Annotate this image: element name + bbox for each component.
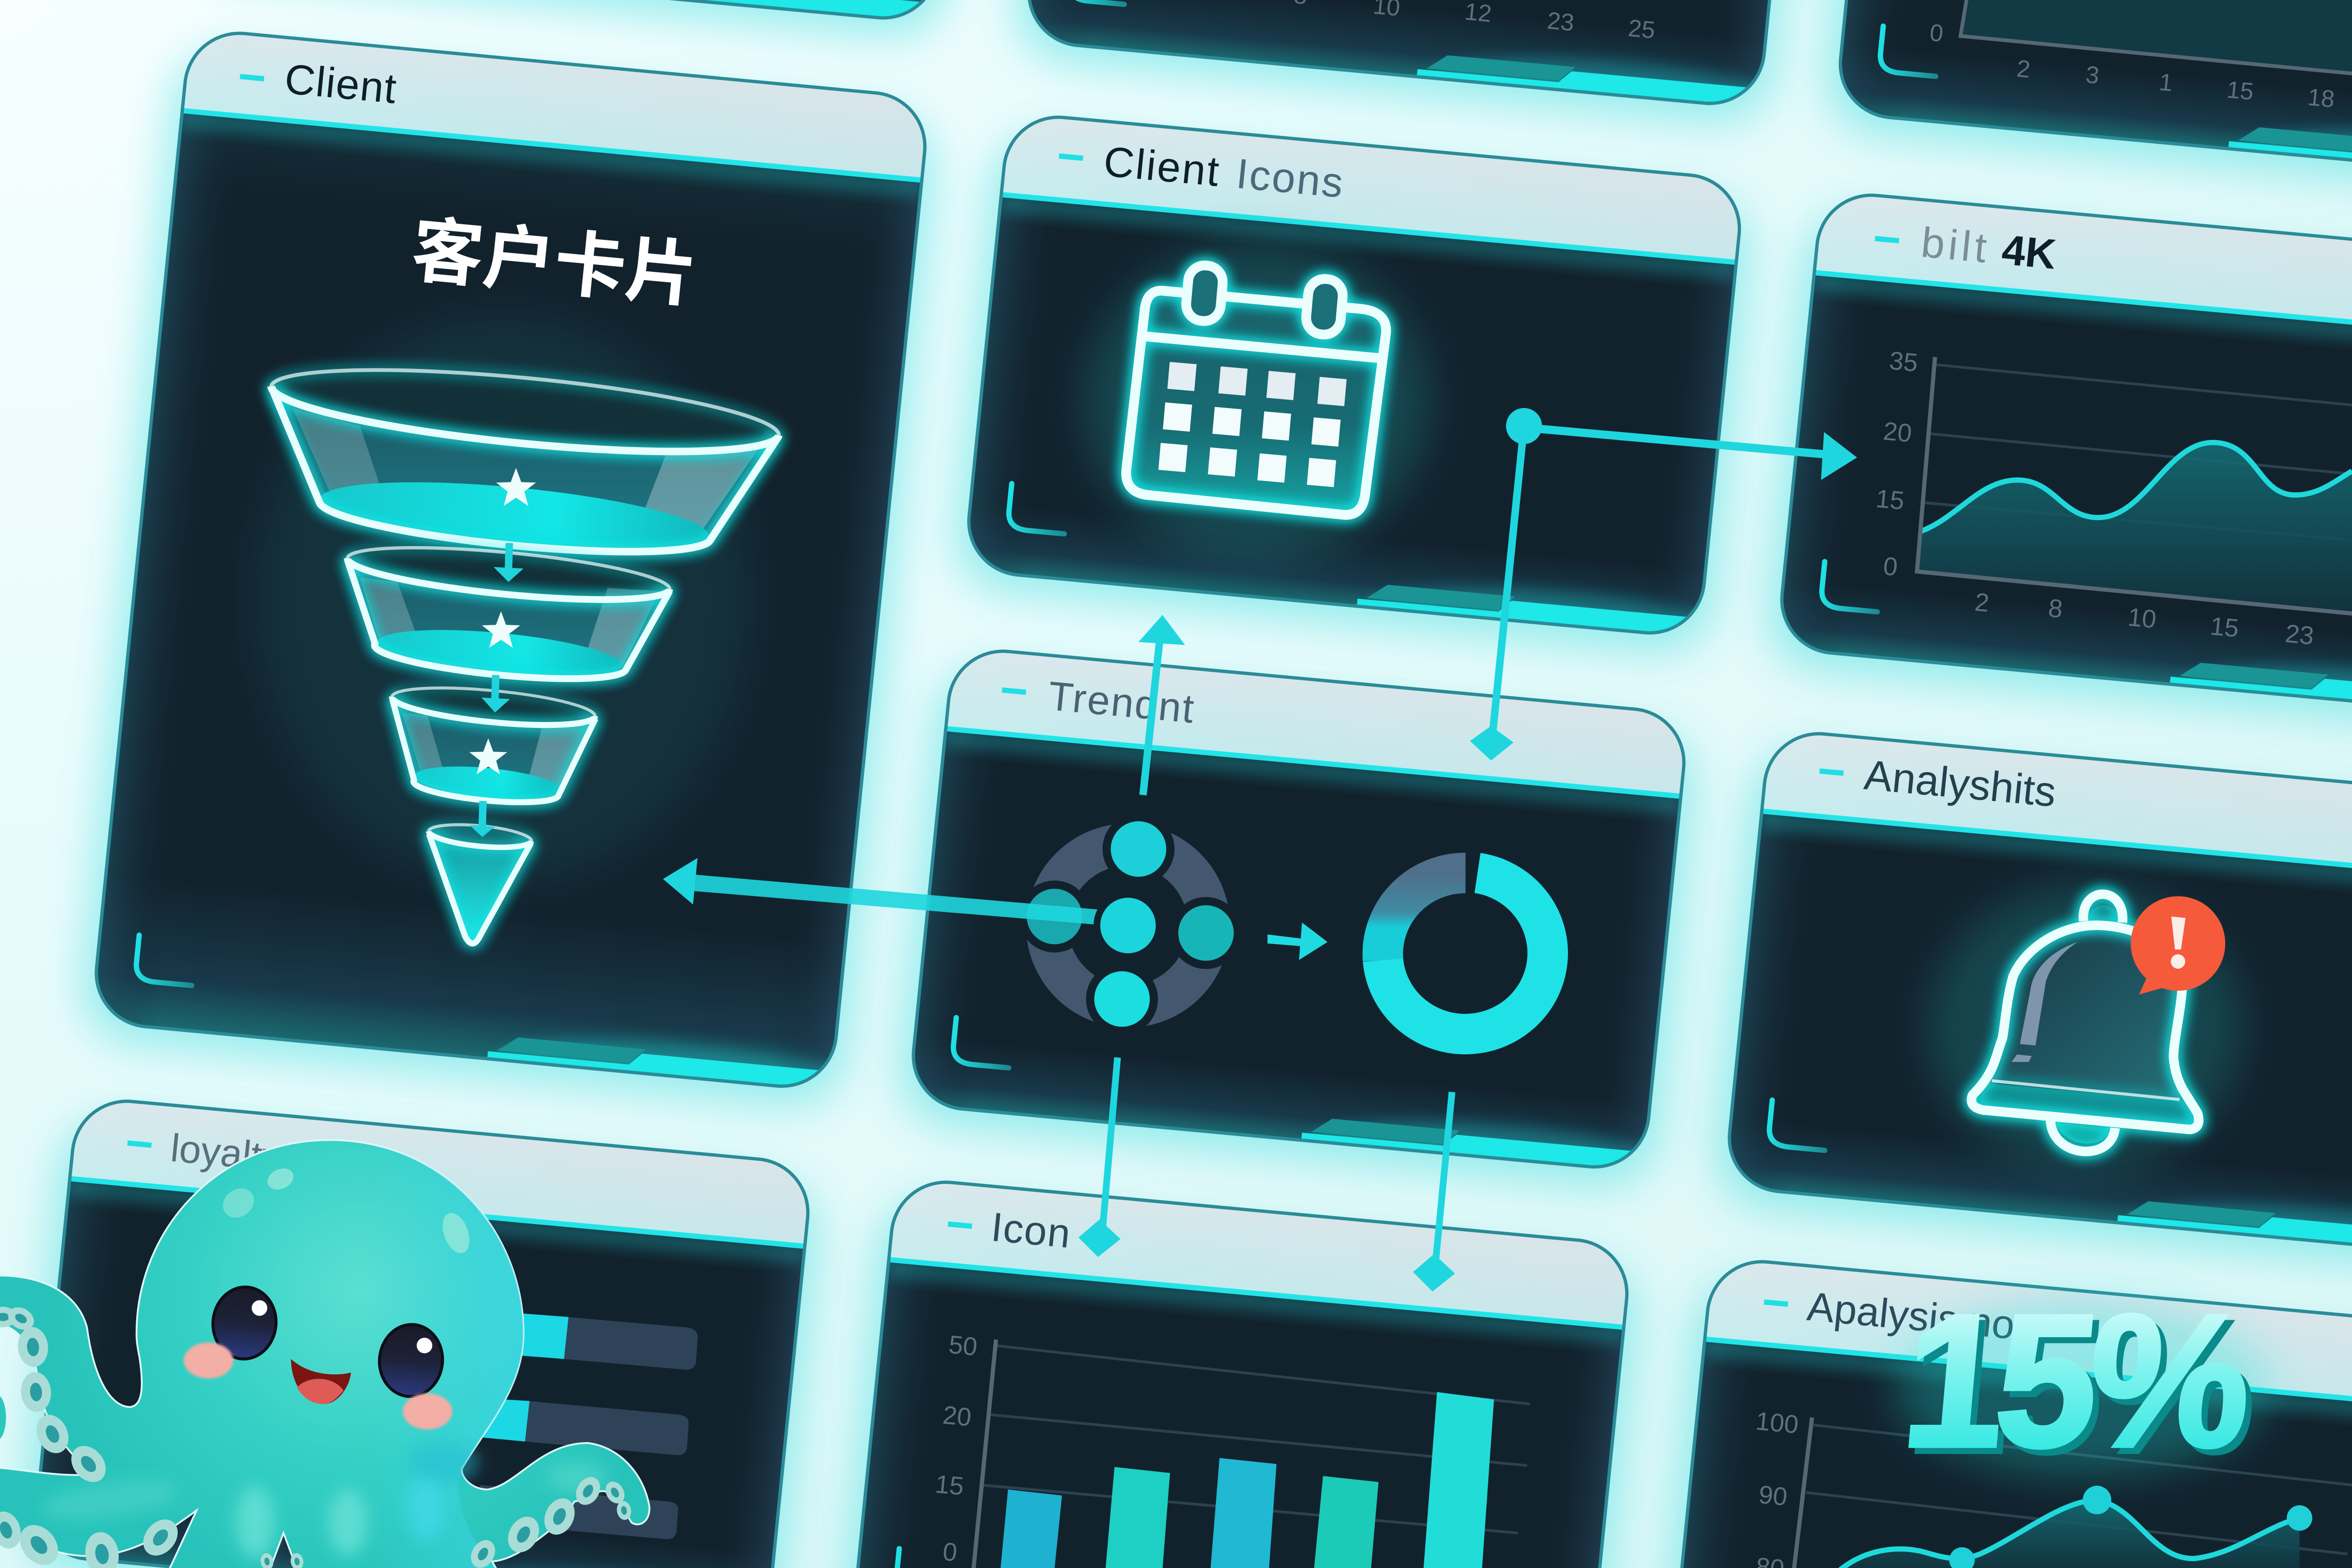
panel: top middle partial card bbox=[1008, 0, 1864, 147]
panel: top left partial card bbox=[182, 0, 1038, 61]
connector: dot to donut bbox=[1470, 426, 1524, 760]
connector: wheel down bbox=[1078, 1057, 1120, 1257]
far left arm tip bbox=[0, 1395, 6, 1440]
panel: Trendnt bbox=[893, 645, 1749, 1210]
right arm suckers bbox=[466, 1473, 633, 1568]
bell ambient glow bbox=[1927, 885, 2243, 1170]
mouth bbox=[291, 1359, 351, 1404]
donut chart bbox=[1383, 873, 1548, 1034]
panel: Icon bbox=[836, 1176, 1692, 1568]
heading: customer card: 客户卡片 bbox=[408, 210, 701, 316]
line chart: 90 bbox=[1757, 1480, 1788, 1511]
panel: Analyshits bbox=[1709, 728, 2352, 1293]
tier 4 cone bbox=[427, 821, 532, 945]
connector: donut down bbox=[1413, 1092, 1455, 1291]
header dash bbox=[1820, 771, 1844, 773]
connector: dot to line chart arrow bbox=[1506, 408, 1857, 480]
octopus mascot bbox=[0, 1140, 650, 1568]
header dash bbox=[1002, 690, 1026, 692]
soft shading bbox=[40, 1442, 607, 1559]
upper arm suckers bbox=[0, 1303, 113, 1489]
line chart: 8 bbox=[2047, 594, 2064, 623]
title: Client Icons bbox=[1102, 138, 1347, 206]
lower arm suckers bbox=[0, 1507, 185, 1568]
progress bars bbox=[477, 1313, 698, 1539]
header dash bbox=[1875, 238, 1899, 241]
tier 3 bbox=[391, 681, 596, 805]
header dash bbox=[1059, 156, 1083, 158]
line chart: 2 bbox=[1974, 588, 1991, 617]
header dash bbox=[128, 1143, 152, 1145]
bar chart: 0 bbox=[941, 1537, 958, 1567]
funnel bbox=[255, 315, 782, 945]
funnel ambient glow bbox=[255, 315, 750, 885]
chart fragment: 2 bbox=[2016, 55, 2032, 83]
small arrow bbox=[1267, 923, 1328, 960]
big stat: 15%: 15% bbox=[1902, 1281, 2263, 1492]
line chart: 15 bbox=[2209, 612, 2240, 643]
line chart bbox=[1874, 346, 2352, 650]
chart fragment: 18 bbox=[2306, 83, 2336, 113]
line chart: 35 bbox=[1888, 346, 1919, 377]
chart fragment: 1 bbox=[2158, 68, 2174, 97]
panel: top right partial card bbox=[1820, 0, 2352, 219]
header dash bbox=[240, 76, 264, 79]
icon: calendar bbox=[1085, 245, 1429, 560]
title: Analyshits bbox=[1862, 751, 2058, 816]
line chart: 100 bbox=[1755, 1406, 1800, 1439]
bell highlight bbox=[2011, 942, 2077, 1062]
header dash bbox=[948, 1224, 972, 1226]
title: loyalty bbox=[169, 1126, 284, 1180]
axis labels bbox=[1292, 0, 1657, 44]
connector: wheel up arrow bbox=[1138, 615, 1185, 795]
chart fragment: 15 bbox=[2225, 76, 2255, 105]
alert badge bbox=[2131, 896, 2225, 995]
axis labels: 25 bbox=[1627, 15, 1657, 44]
line chart: 10 bbox=[2126, 603, 2158, 634]
bar chart: 15 bbox=[934, 1470, 965, 1501]
axis labels: 23 bbox=[1546, 7, 1576, 36]
line chart: 0 bbox=[1882, 552, 1899, 581]
calendar date grid bbox=[1159, 362, 1347, 487]
title: bilt 4K bbox=[1919, 219, 2058, 278]
right side cyan tint bbox=[330, 1140, 523, 1568]
bar chart: 20 bbox=[941, 1401, 972, 1432]
calendar ambient glow bbox=[1085, 245, 1429, 560]
header dash bbox=[1764, 1302, 1788, 1304]
panel: Analysis bbox=[1652, 1256, 2352, 1568]
big stat: 15%: 15% bbox=[1895, 1275, 2257, 1486]
line chart: 20 bbox=[1882, 416, 1913, 448]
chart fragment: 0 bbox=[1928, 19, 1944, 47]
cheeks bbox=[184, 1342, 452, 1429]
leg notch suckers bbox=[259, 1552, 305, 1568]
tier 1 bbox=[268, 354, 782, 566]
line chart bbox=[1755, 1406, 2352, 1568]
chart fragment bbox=[1928, 0, 2352, 113]
title: Client bbox=[283, 55, 399, 112]
title: Trendnt bbox=[1046, 673, 1197, 732]
icon: bell bbox=[1927, 885, 2243, 1170]
connector: wheel left arrow bbox=[663, 858, 1110, 925]
panel: loyalty bbox=[17, 1095, 873, 1568]
funnel arrows bbox=[469, 543, 523, 837]
left eye bbox=[210, 1284, 279, 1362]
title: Icon bbox=[989, 1204, 1073, 1257]
right eye bbox=[376, 1322, 446, 1399]
center node bbox=[1100, 898, 1156, 953]
panel: Client bbox=[76, 27, 986, 1129]
title: Apalysis no bbox=[1805, 1284, 2017, 1348]
panel: Client Icons bbox=[948, 111, 1805, 676]
head highlights bbox=[217, 1165, 474, 1257]
tier 2 bbox=[345, 537, 672, 686]
bar chart: 50 bbox=[947, 1330, 979, 1361]
node wheel bbox=[1027, 821, 1234, 1027]
body silhouette bbox=[0, 1140, 650, 1568]
line chart: 23 bbox=[2284, 619, 2315, 650]
bar chart bbox=[934, 1330, 1530, 1568]
line chart: 15 bbox=[1874, 484, 1906, 515]
chart fragment: 3 bbox=[2084, 61, 2100, 89]
panel: bilt 4K bbox=[1762, 189, 2352, 754]
